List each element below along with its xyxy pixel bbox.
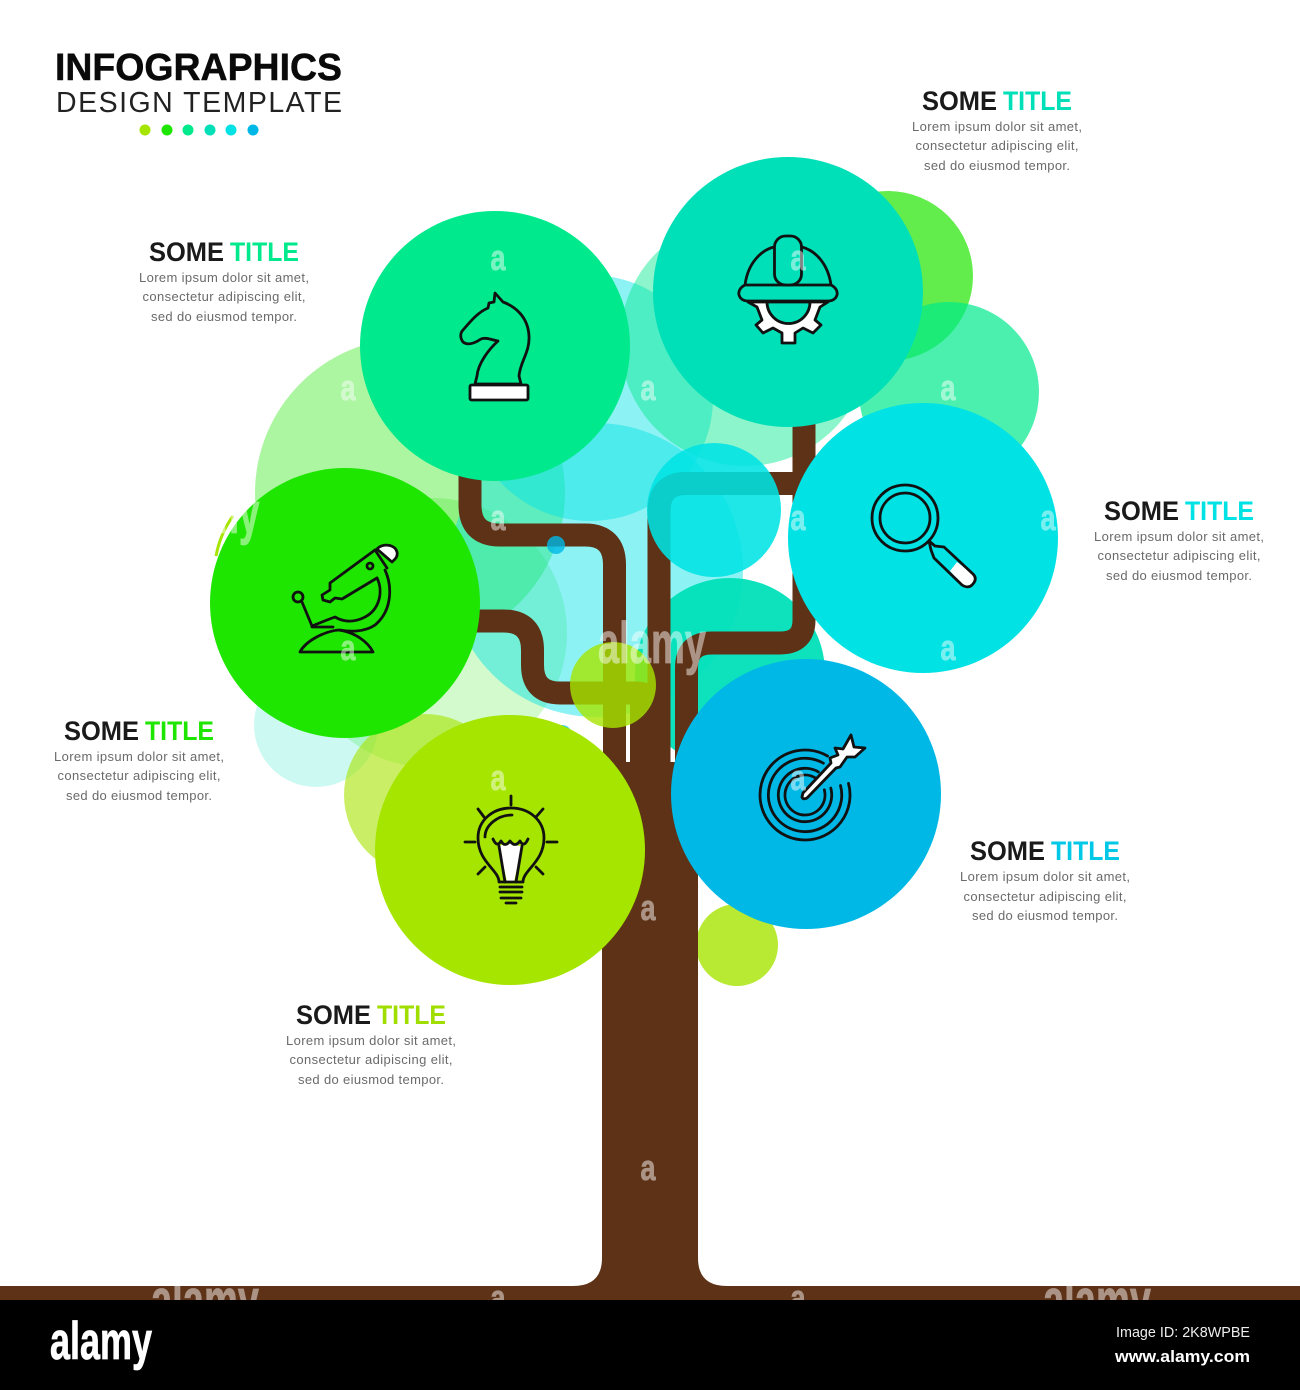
stock watermarks: a [790, 757, 806, 798]
stock watermarks: a [490, 757, 506, 798]
text block: strategy: Lorem ipsum dolor sit amet, [139, 270, 309, 285]
stock watermarks: a [640, 1147, 656, 1188]
stock watermarks: a [1040, 497, 1056, 538]
title: infographics design template [55, 47, 342, 136]
text block: strategy: consectetur adipiscing elit, [142, 289, 306, 304]
text block: engineering: TITLE [1003, 86, 1072, 116]
tree branches [470, 420, 804, 770]
text block: strategy: sed do eiusmod tempor. [151, 309, 297, 324]
stock watermarks: a [940, 367, 956, 408]
text block: engineering: SOME [922, 86, 997, 116]
footer bar: Image ID: 2K8WPBE [1116, 1324, 1250, 1341]
icon: target with arrow [760, 735, 865, 840]
text block: search [1094, 496, 1264, 583]
icon: hard hat with gear [739, 236, 837, 343]
text block: science: sed do eiusmod tempor. [66, 788, 212, 803]
stock watermarks: a [790, 497, 806, 538]
stock watermarks: a [790, 1277, 806, 1318]
background foliage circles [216, 191, 1039, 986]
text block: search: sed do eiusmod tempor. [1106, 568, 1252, 583]
text block: science: TITLE [145, 716, 214, 746]
icon: magnifying glass [872, 485, 975, 587]
tree trunk and ground [0, 762, 1300, 1300]
text block: science: consectetur adipiscing elit, [58, 768, 220, 783]
text block: engineering: consectetur adipiscing elit, [916, 138, 1078, 153]
text block: idea: SOME [296, 1000, 371, 1030]
icon: light bulb [465, 796, 557, 903]
text block: target: consectetur adipiscing elit, [964, 889, 1126, 904]
text block: idea [286, 1000, 456, 1087]
text block: search: SOME [1104, 496, 1179, 526]
text block: target: SOME [970, 836, 1045, 866]
text block: idea: Lorem ipsum dolor sit amet, [286, 1033, 456, 1048]
stock watermarks: alamy [151, 1268, 259, 1333]
stock watermarks: a [490, 1277, 506, 1318]
text block: strategy: SOME [149, 237, 224, 267]
text block: search: consectetur adipiscing elit, [1098, 548, 1260, 563]
overlay circles on branches [547, 443, 781, 728]
text block: target: Lorem ipsum dolor sit amet, [960, 869, 1130, 884]
footer bar: alamy [50, 1312, 152, 1371]
text block: engineering: Lorem ipsum dolor sit amet, [912, 119, 1082, 134]
step circle: idea [375, 715, 645, 985]
text block: target: sed do eiusmod tempor. [972, 908, 1118, 923]
stock watermarks: a [490, 237, 506, 278]
stock watermarks: a [340, 367, 356, 408]
title: infographics design template: INFOGRAPHICS [55, 47, 342, 89]
icon: chess knight [461, 293, 529, 400]
icon: microscope [293, 545, 397, 652]
text block: science: SOME [64, 716, 139, 746]
stock watermarks: a [490, 497, 506, 538]
step circle: engineering [653, 157, 923, 427]
stock watermarks: a [640, 887, 656, 928]
step circle: target [671, 659, 941, 929]
stock watermarks: a [640, 367, 656, 408]
text block: engineering [912, 86, 1082, 173]
stock watermarks: alamy [154, 481, 260, 546]
footer bar [0, 1300, 1300, 1390]
text block: idea: TITLE [377, 1000, 446, 1030]
text block: search: TITLE [1185, 496, 1254, 526]
text block: engineering: sed do eiusmod tempor. [924, 158, 1070, 173]
title: infographics design template: DESIGN TEMPLATE [56, 87, 342, 119]
step circle: search [788, 403, 1058, 673]
text block: science: Lorem ipsum dolor sit amet, [54, 749, 224, 764]
text block: idea: consectetur adipiscing elit, [290, 1052, 452, 1067]
stock watermarks: a [940, 627, 956, 668]
stock watermarks: a [790, 237, 806, 278]
footer bar: www.alamy.com [1114, 1347, 1250, 1366]
text block: strategy: TITLE [230, 237, 299, 267]
text block: science [54, 716, 224, 803]
text block: strategy [139, 237, 309, 324]
stock watermarks: alamy [598, 611, 706, 676]
step circle: science [210, 468, 480, 738]
stock watermarks: alamy [1043, 1268, 1151, 1333]
text block: target [960, 836, 1130, 923]
text block: search: Lorem ipsum dolor sit amet, [1094, 529, 1264, 544]
text block: target: TITLE [1051, 836, 1120, 866]
text block: idea: sed do eiusmod tempor. [298, 1072, 444, 1087]
stock watermarks [151, 237, 1151, 1333]
step circle: strategy [360, 211, 630, 481]
stock watermarks: a [340, 627, 356, 668]
